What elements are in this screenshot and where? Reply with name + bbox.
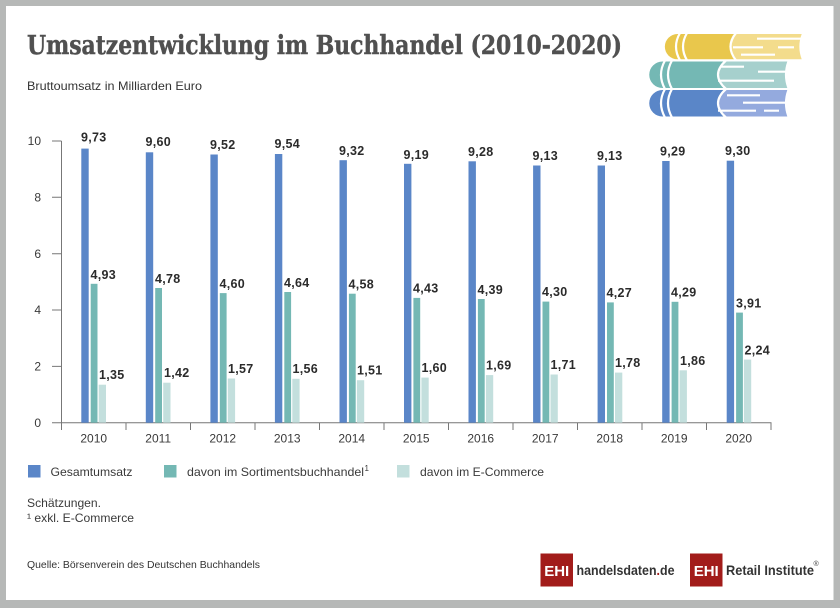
bars: 2014: 9,32 — [339, 144, 365, 158]
icon: blue book — [649, 89, 788, 118]
bars: 2012: 4,60 — [220, 277, 245, 291]
x axis: 2010 — [80, 432, 107, 446]
bars: 2017 — [532, 149, 576, 423]
bars: 2018: 1,78 — [615, 356, 641, 370]
x axis: 2017 — [532, 432, 559, 446]
y axis: 10 — [28, 134, 41, 148]
bars: 2017: 9,13 — [532, 149, 558, 163]
bars: 2013 — [274, 137, 318, 423]
x axis: 2014 — [338, 432, 365, 446]
legend: Sortimentsbuchhandel: davon im Sortimentsbuchhandel — [187, 465, 364, 479]
bars: 2020: 9,30 — [725, 144, 751, 158]
bars: 2011: 4,78 — [155, 272, 181, 286]
footnotes — [27, 496, 134, 525]
bars: 2013: 9,54 — [274, 137, 300, 151]
bars: 2011: 1,42 — [164, 366, 190, 380]
footnotes: Schätzungen. — [27, 496, 101, 510]
x axis: 2012 — [209, 432, 236, 446]
bars: 2018: 4,27 — [606, 286, 632, 300]
bars: 2013: 1,56 — [292, 362, 318, 376]
bars: 2017: 1,71 — [550, 358, 576, 372]
bars: 2016: 1,69 — [486, 358, 512, 372]
y axis: 0 — [34, 416, 41, 430]
x axis: 2016 — [467, 432, 494, 446]
y axis: 2 — [34, 360, 41, 374]
legend: Gesamtumsatz: Gesamtumsatz — [50, 465, 132, 479]
bars: 2012 — [210, 138, 254, 423]
logo: EHI handelsdaten.de: EHI — [544, 563, 569, 580]
logo: EHI Retail Institute: ® — [814, 560, 820, 568]
bars: 2016: 9,28 — [468, 145, 494, 159]
bars: 2014: 1,51 — [357, 364, 383, 378]
bars: 2016 — [468, 145, 512, 423]
legend: E-Commerce: davon im E-Commerce — [420, 465, 544, 479]
bars: 2020 — [725, 144, 770, 423]
title: Umsatzentwicklung im Buchhandel (2010-2020) — [27, 31, 622, 61]
bar chart — [28, 131, 772, 446]
bars: 2019 — [660, 144, 706, 423]
bars: 2014: 4,58 — [348, 278, 374, 292]
bars: 2016: 4,39 — [478, 283, 503, 297]
bars: 2015 — [404, 148, 447, 423]
source: Quelle: Börsenverein des Deutschen Buchhandels — [27, 559, 260, 571]
bars: 2015: 1,60 — [422, 361, 447, 375]
bars: 2015: 4,43 — [413, 282, 439, 296]
bars: 2020: 2,24 — [744, 344, 770, 358]
y axis — [28, 134, 62, 430]
bars: 2010 — [81, 131, 125, 423]
logo: EHI Retail Institute: Retail Institute — [726, 562, 814, 578]
bars: 2018: 9,13 — [597, 149, 623, 163]
icon: stack of books — [649, 33, 802, 118]
bars: 2013: 4,64 — [284, 276, 310, 290]
x axis: 2018 — [596, 432, 623, 446]
icon: yellow book — [665, 33, 802, 60]
x axis: 2011 — [145, 432, 171, 446]
footnotes: ¹ exkl. E-Commerce — [27, 511, 134, 525]
bars: 2010: 4,93 — [90, 268, 116, 282]
legend: Sortimentsbuchhandel: 1 — [364, 464, 370, 473]
bars: 2017: 4,30 — [542, 285, 568, 299]
x axis: 2019 — [661, 432, 688, 446]
bars: 2014 — [339, 144, 383, 423]
logo: EHI handelsdaten.de — [540, 554, 675, 586]
x axis: 2020 — [725, 432, 752, 446]
logo: EHI handelsdaten.de: handelsdaten.de — [576, 563, 675, 578]
legend — [28, 464, 544, 479]
bars: 2010: 9,73 — [81, 131, 107, 145]
bars: 2019: 1,86 — [680, 354, 706, 368]
icon: teal book — [649, 60, 788, 89]
subtitle: Bruttoumsatz in Milliarden Euro — [27, 79, 202, 93]
x axis: 2015 — [403, 432, 430, 446]
bars: 2019: 9,29 — [660, 144, 686, 158]
bars: 2010: 1,35 — [99, 368, 125, 382]
x axis: 2013 — [274, 432, 301, 446]
bars: 2012: 1,57 — [228, 362, 254, 376]
x axis — [62, 423, 772, 446]
logo: EHI Retail Institute: EHI — [694, 563, 719, 580]
bars: 2015: 9,19 — [404, 148, 429, 162]
bars: 2018 — [597, 149, 641, 423]
logo: EHI Retail Institute — [690, 554, 820, 586]
y axis: 6 — [34, 247, 41, 261]
y axis: 4 — [34, 303, 41, 317]
bars: 2019: 4,29 — [671, 286, 697, 300]
bars: 2012: 9,52 — [210, 138, 236, 152]
y axis: 8 — [34, 190, 41, 204]
bars: 2011 — [146, 135, 190, 423]
bars: 2011: 9,60 — [146, 135, 171, 149]
bars: 2020: 3,91 — [736, 296, 762, 310]
